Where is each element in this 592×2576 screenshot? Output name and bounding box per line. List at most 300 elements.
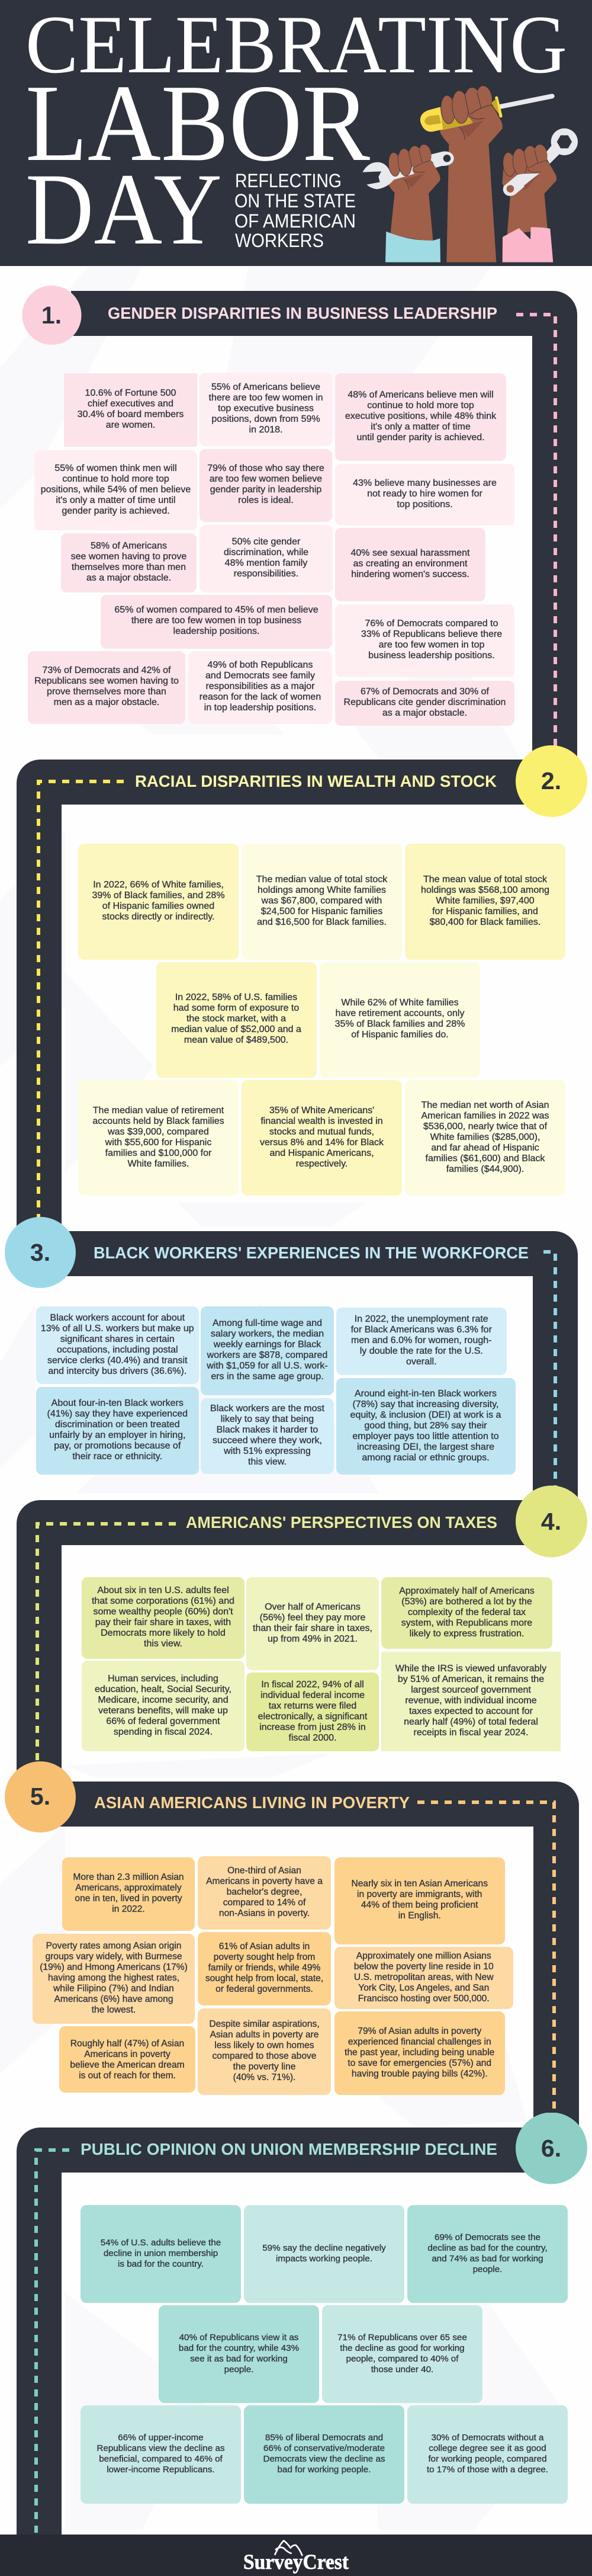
- card: complexity of the federal tax: [408, 1607, 526, 1617]
- card: [200, 525, 333, 592]
- card: [201, 1398, 334, 1474]
- card: 85% of liberal Democrats and: [265, 2433, 383, 2443]
- card: 58% of Americans: [91, 541, 167, 551]
- card: More than 2.3 million Asian: [73, 1872, 184, 1882]
- card: there are too few women in: [208, 393, 323, 403]
- card: 73% of Democrats and 42% of: [42, 665, 170, 675]
- card: 43% believe many businesses are: [353, 478, 497, 488]
- card: [188, 651, 332, 724]
- card: roles is ideal.: [238, 495, 294, 505]
- card: positions, while 54% of men believe: [41, 485, 191, 494]
- card: 66% of conservative/moderate: [263, 2443, 385, 2453]
- card: had some form of exposure to: [173, 1003, 299, 1013]
- card: business leadership positions.: [368, 651, 495, 661]
- card: and $16,500 for Black families.: [257, 917, 387, 927]
- card: electronically, a significant: [258, 1711, 367, 1722]
- card: (56%) feel they pay more: [260, 1613, 365, 1622]
- card: in 2022.: [112, 1904, 145, 1914]
- card: Black makes it harder to: [217, 1425, 318, 1435]
- card: continue to hold more top: [62, 474, 169, 483]
- card: likely to express frustration.: [410, 1628, 524, 1639]
- card: [61, 533, 197, 592]
- card: 76% of Democrats compared to: [365, 619, 498, 629]
- card: [334, 1857, 505, 1944]
- heading: GENDER DISPARITIES IN BUSINESS LEADERSHIP: [108, 304, 497, 322]
- card: holdings was $568,100 among: [421, 885, 549, 895]
- card: discrimination or been treated: [55, 1420, 180, 1430]
- card: prove themselves more than: [47, 687, 166, 697]
- illustration: raised fists with tools: [362, 85, 578, 262]
- card: Democrats view the decline as: [263, 2454, 385, 2464]
- card: White families ($285,000),: [430, 1132, 540, 1142]
- card: [320, 962, 480, 1078]
- card: [33, 1934, 195, 2024]
- card: while Filipino (7%) and Indian: [53, 1984, 174, 1994]
- card: are too few women believe: [210, 474, 322, 484]
- card: beneficial, compared to 46% of: [99, 2454, 223, 2464]
- card: [335, 604, 514, 677]
- card: executive positions, while 48% think: [345, 411, 496, 421]
- card: and 74% as bad for working: [432, 2254, 543, 2263]
- card: experienced financial challenges in: [348, 2037, 491, 2046]
- card: below the poverty line reside in 10: [354, 1961, 494, 1972]
- card: the poverty line: [233, 2062, 295, 2072]
- card: continue to hold more top: [367, 401, 474, 411]
- badge 6: [516, 2113, 587, 2184]
- badge 4: 4.: [541, 1508, 561, 1535]
- card: [381, 1652, 561, 1751]
- card: In 2022, the unemployment rate: [355, 1314, 488, 1324]
- card: likely to say that being: [221, 1414, 314, 1424]
- card: unfairly by an employer in hiring,: [49, 1430, 185, 1440]
- card: and Democrats see family: [205, 671, 315, 681]
- card: receipts in fiscal year 2024.: [414, 1728, 528, 1738]
- card: Human services, including: [108, 1673, 218, 1684]
- card: is out of reach for them.: [79, 2071, 176, 2081]
- card: people.: [224, 2364, 253, 2375]
- card: The median value of total stock: [256, 874, 387, 885]
- card: with $55,600 for Hispanic: [105, 1138, 211, 1147]
- card: [82, 1661, 244, 1751]
- card: [246, 1577, 379, 1670]
- badge 1: 1.: [41, 302, 62, 329]
- card: 71% of Republicans over 65 see: [337, 2332, 467, 2343]
- card: poverty sought help from: [214, 1952, 315, 1962]
- card: impacts working people.: [276, 2254, 372, 2263]
- card: are women.: [106, 420, 155, 430]
- card: significant shares in certain: [60, 1334, 175, 1344]
- card: ers in the same age group.: [211, 1372, 324, 1382]
- card: 35% of White Americans': [269, 1106, 374, 1115]
- card: [156, 962, 316, 1078]
- card: York City, Los Angeles, and San: [358, 1982, 489, 1993]
- card: [198, 1856, 331, 1930]
- card: responsibilities as a major: [205, 681, 315, 691]
- card: 66% of federal government: [106, 1716, 220, 1726]
- card: to 17% of those with a degree.: [427, 2465, 548, 2475]
- middle hand with screwdriver: [420, 85, 552, 144]
- card: [64, 373, 197, 447]
- card: gender parity is achieved.: [62, 506, 170, 515]
- card: was $39,000, compared: [108, 1127, 209, 1136]
- card: Democrats more likely to hold: [101, 1628, 226, 1638]
- badge 3: [5, 1217, 76, 1288]
- card: 67% of Democrats and 30% of: [361, 687, 489, 697]
- card: up from 49% in 2021.: [268, 1634, 358, 1643]
- section 5 road, heading and badge: [5, 1761, 579, 2126]
- card: this view.: [248, 1457, 287, 1467]
- card: and far ahead of Hispanic: [431, 1142, 539, 1153]
- card: [200, 449, 332, 522]
- subtitle: WORKERS: [235, 230, 324, 251]
- card: In 2022, 66% of White families,: [93, 880, 224, 890]
- card: [246, 1673, 379, 1751]
- subtitle: OF AMERICAN: [234, 210, 356, 232]
- section 1 road, heading and badge: [22, 286, 577, 756]
- badge 4: [516, 1486, 587, 1557]
- card: than their fair share in taxes,: [253, 1623, 372, 1633]
- card: 61% of Asian adults in: [219, 1941, 310, 1952]
- card: 44% of them being proficient: [361, 1900, 478, 1910]
- road: [17, 2128, 533, 2542]
- card: in English.: [398, 1911, 441, 1921]
- card: $24,500 for Hispanic families: [261, 906, 382, 917]
- card: in top leadership positions.: [204, 703, 316, 713]
- card: decline as bad for the country,: [427, 2243, 548, 2253]
- card: it's only a matter of time until: [56, 495, 176, 505]
- card: salary workers, the median: [211, 1329, 324, 1339]
- card: [59, 2026, 195, 2093]
- card: or federal governments.: [215, 1984, 313, 1994]
- card: (40% vs. 71%).: [233, 2072, 295, 2082]
- card: While 62% of White families: [341, 998, 459, 1008]
- card: non-Asians in poverty.: [219, 1908, 310, 1918]
- card: the lowest.: [92, 2005, 136, 2015]
- card: as a major obstacle.: [382, 708, 467, 718]
- card: [322, 2305, 482, 2403]
- heading: RACIAL DISPARITIES IN WEALTH AND STOCK: [135, 772, 497, 790]
- card: U.S. metropolitan areas, with New: [354, 1972, 494, 1982]
- card: [244, 2205, 404, 2303]
- road: [59, 1782, 579, 2145]
- card: with $1,059 for all U.S. work-: [207, 1361, 328, 1371]
- card: Among full-time wage and: [213, 1318, 322, 1328]
- card: [242, 1080, 402, 1196]
- card: to save for emergencies (57%) and: [348, 2058, 491, 2068]
- card: American families in 2022 was: [421, 1110, 549, 1121]
- card: of Hispanic families owned: [102, 901, 214, 911]
- card: 55% of Americans believe: [211, 382, 320, 392]
- card: some wealthy people (60%) don't: [93, 1607, 233, 1617]
- card: Republicans cite gender discrimination: [344, 697, 506, 707]
- card: employer pays too little attention to: [352, 1431, 499, 1441]
- card: of Hispanic families do.: [351, 1030, 449, 1040]
- section 6 road, heading and badge: [17, 2113, 587, 2535]
- card: Around eight-in-ten Black workers: [355, 1389, 497, 1398]
- card: While the IRS is viewed unfavorably: [395, 1664, 546, 1674]
- card: increasing DEI, the largest share: [357, 1442, 494, 1452]
- badge 3: 3.: [30, 1239, 50, 1266]
- card: versus 8% and 14% for Black: [260, 1138, 384, 1147]
- card: spending in fiscal 2024.: [114, 1726, 213, 1737]
- card: Roughly half (47%) of Asian: [70, 2039, 184, 2049]
- card: Americans (6%) have among: [54, 1994, 173, 2004]
- card: workers are $878, compared: [207, 1350, 327, 1360]
- card: Asian adults in poverty are: [210, 2030, 318, 2040]
- card: Black workers are the most: [210, 1404, 324, 1414]
- card: The mean value of total stock: [423, 874, 547, 885]
- card: [405, 844, 565, 960]
- card: by 51% of American, it remains the: [398, 1674, 544, 1684]
- card: revenue, with individual income: [405, 1696, 537, 1706]
- card: there are too few women in top business: [131, 616, 301, 626]
- card: occupations, including postal: [57, 1345, 178, 1354]
- badge 5: [5, 1761, 76, 1832]
- card: largest sourceof government: [411, 1685, 531, 1695]
- card: median value of $52,000 and a: [171, 1024, 301, 1034]
- card: Republicans see women having to: [34, 676, 179, 686]
- card: [336, 1308, 507, 1375]
- card: taxes expected to account for: [409, 1706, 533, 1716]
- card: mean value of $489,500.: [184, 1035, 288, 1045]
- card: [242, 844, 402, 960]
- card: top positions.: [397, 499, 453, 510]
- wordmark: SurveyCrest: [243, 2550, 349, 2574]
- card: not ready to hire women for: [367, 489, 482, 499]
- card: bad for working people.: [278, 2465, 371, 2475]
- card: [335, 463, 514, 526]
- card: those under 40.: [371, 2364, 433, 2375]
- card: White families.: [127, 1159, 189, 1168]
- card: decline in union membership: [104, 2248, 218, 2258]
- section 3 road, heading and badge: [5, 1217, 578, 1497]
- card: have retirement accounts, only: [336, 1008, 464, 1018]
- card: fiscal 2000.: [289, 1732, 336, 1743]
- right arm with sleeve: [503, 193, 553, 262]
- card: lower-income Republicans.: [107, 2465, 215, 2475]
- card: 13% of all U.S. workers but make up: [41, 1324, 194, 1333]
- card: until gender parity is achieved.: [356, 432, 485, 443]
- card: [159, 2305, 319, 2403]
- card: compared to 14% of: [223, 1898, 305, 1908]
- heading: BLACK WORKERS' EXPERIENCES IN THE WORKFORCE: [94, 1244, 529, 1262]
- card: families ($44,900).: [446, 1164, 524, 1174]
- road: [71, 291, 577, 770]
- card: in poverty are immigrants, with: [357, 1889, 482, 1899]
- card: 35% of Black families and 28%: [335, 1019, 465, 1029]
- right hand with wrench: [502, 129, 578, 196]
- card: system, with Republicans more: [401, 1617, 532, 1628]
- card: responsibilities.: [234, 569, 298, 579]
- card: [201, 1306, 334, 1395]
- card: among racial or ethnic groups.: [362, 1453, 490, 1462]
- card: (53%) are bothered a lot by the: [401, 1596, 532, 1607]
- card: Americans in poverty have a: [206, 1876, 323, 1886]
- card: ly double the rate for the U.S.: [360, 1346, 483, 1356]
- card: [78, 1080, 239, 1196]
- card: pay, or promotions because of: [54, 1441, 181, 1451]
- card: see it as bad for working: [190, 2353, 288, 2364]
- card: [34, 450, 197, 530]
- card: [36, 1386, 199, 1475]
- title: labor: LABOR: [25, 62, 370, 184]
- card: Nearly six in ten Asian Americans: [351, 1879, 488, 1889]
- card: the stock market, with a: [186, 1014, 286, 1024]
- card: their race or ethnicity.: [72, 1452, 162, 1462]
- card: individual federal income: [260, 1690, 365, 1700]
- card: Black workers account for about: [50, 1313, 185, 1322]
- card: $536,000, nearly twice that of: [423, 1121, 547, 1132]
- title: day: DAY: [25, 153, 222, 266]
- card: for Black Americans was 6.3% for: [351, 1325, 492, 1335]
- card: sought help from local, state,: [205, 1973, 323, 1984]
- card: [62, 1857, 195, 1931]
- card: Approximately one million Asians: [356, 1950, 491, 1961]
- panel: section 6 union membership: [17, 2113, 587, 2535]
- card: [407, 2405, 568, 2504]
- card: [405, 1080, 565, 1196]
- card: [198, 1932, 331, 2005]
- card: [101, 595, 332, 648]
- card: for Hispanic families, and: [432, 906, 538, 917]
- card: people, compared to 40% of: [346, 2353, 458, 2364]
- card: and intercity bus drivers (36.6%).: [48, 1366, 186, 1376]
- card: 54% of U.S. adults believe the: [101, 2237, 221, 2248]
- subtitle: [234, 170, 356, 251]
- card: (19%) and Hmong Americans (17%): [40, 1962, 188, 1972]
- card: Francisco hosting over 500,000.: [358, 1993, 490, 2004]
- card: Poverty rates among Asian origin: [46, 1941, 181, 1951]
- card: is bad for the country.: [118, 2258, 204, 2269]
- card: believe the American dream: [70, 2060, 185, 2070]
- card: 48% of Americans believe men will: [348, 390, 494, 400]
- card: 69% of Democrats see the: [435, 2232, 540, 2242]
- panel: section 2 racial disparities: [17, 745, 587, 1226]
- card: respectively.: [296, 1159, 348, 1168]
- card: 59% say the decline negatively: [262, 2243, 386, 2253]
- card: [82, 1577, 244, 1659]
- card: succeed where they work,: [213, 1436, 322, 1446]
- card: education, healt, Social Security,: [95, 1684, 231, 1694]
- card: as creating an environment: [353, 559, 468, 569]
- card: [244, 2405, 404, 2504]
- header banner: [0, 0, 592, 266]
- card: that some corporations (61%) and: [92, 1596, 234, 1606]
- card: Approximately half of Americans: [399, 1585, 535, 1596]
- card: see women having to prove: [71, 552, 186, 562]
- badge 2: [516, 745, 587, 817]
- road: [17, 760, 533, 1244]
- card: 30.4% of board members: [78, 409, 184, 419]
- card: chief executives and: [88, 399, 173, 409]
- heading: AMERICANS' PERSPECTIVES ON TAXES: [186, 1513, 497, 1531]
- card: [336, 1378, 515, 1475]
- card: [198, 2008, 331, 2095]
- card: Americans in poverty: [84, 2049, 170, 2059]
- card: as a major obstacle.: [86, 573, 171, 583]
- card: About six in ten U.S. adults feel: [97, 1585, 229, 1595]
- card: 50% cite gender: [232, 537, 300, 547]
- card: 65% of women compared to 45% of men believe: [114, 605, 318, 615]
- middle arm: [446, 143, 496, 262]
- card: $80,400 for Black families.: [430, 917, 540, 927]
- card: 33% of Republicans believe there: [361, 629, 502, 639]
- card: less likely to own homes: [214, 2040, 314, 2050]
- card: 49% of both Republicans: [208, 660, 313, 670]
- card: stocks and mutual funds,: [269, 1127, 374, 1136]
- card: one in ten, lived in poverty: [75, 1893, 182, 1904]
- road: [59, 1231, 578, 1517]
- subtitle: REFLECTING: [235, 170, 342, 191]
- card: [335, 680, 514, 726]
- card: (78%) say that increasing diversity,: [353, 1399, 498, 1409]
- card: compared to those above: [212, 2051, 316, 2061]
- card: themselves more than men: [72, 562, 186, 572]
- icon: mountain: [275, 2540, 303, 2556]
- card: overall.: [406, 1357, 437, 1367]
- card: [381, 1577, 552, 1649]
- card: bachelor's degree,: [227, 1887, 302, 1897]
- card: groups vary widely, with Burmese: [45, 1952, 182, 1962]
- road: [17, 1500, 533, 1801]
- card: 40% of Republicans view it as: [179, 2332, 298, 2343]
- card: top executive business: [218, 403, 314, 414]
- card: holdings among White families: [258, 885, 386, 895]
- card: it's only a matter of time: [371, 422, 471, 432]
- card: [407, 2205, 568, 2303]
- heading: PUBLIC OPINION ON UNION MEMBERSHIP DECLINE: [81, 2140, 497, 2158]
- card: bad for the country, while 43%: [179, 2343, 299, 2353]
- card: [81, 2405, 241, 2504]
- card: 55% of women think men will: [54, 463, 177, 473]
- card: positions, down from 59%: [211, 414, 320, 424]
- left arm with sleeve: [385, 193, 440, 262]
- card: for working people, compared: [428, 2454, 547, 2464]
- footer: [0, 2535, 592, 2576]
- card: 66% of upper-income: [118, 2433, 204, 2443]
- badge 5: 5.: [30, 1783, 50, 1810]
- card: [78, 844, 239, 960]
- card: pay their fair share in taxes, with: [95, 1617, 231, 1627]
- card: The median value of retirement: [93, 1106, 224, 1115]
- card: men as a major obstacle.: [54, 697, 159, 707]
- card: gender parity in leadership: [210, 485, 321, 495]
- badge 6: 6.: [541, 2135, 561, 2162]
- card: are too few women in top: [379, 640, 484, 650]
- card: weekly earnings for Black: [214, 1340, 321, 1350]
- card: Despite similar aspirations,: [209, 2019, 320, 2029]
- card: the decline as good for working: [340, 2343, 465, 2353]
- badge 2: 2.: [541, 767, 561, 794]
- section 2 road, heading and badge: [17, 745, 587, 1226]
- card: 48% mention family: [225, 558, 307, 568]
- card: service clerks (40.4%) and transit: [47, 1356, 188, 1365]
- logo: SurveyCrest: [243, 2540, 349, 2574]
- card: 40% see sexual harassment: [350, 548, 470, 558]
- header title and illustration: [25, 0, 578, 266]
- card: leadership positions.: [173, 626, 259, 636]
- card: In fiscal 2022, 94% of all: [261, 1679, 364, 1690]
- card: [36, 1306, 199, 1384]
- card: men and 6.0% for women, rough-: [351, 1335, 491, 1345]
- card: [334, 1947, 513, 2009]
- card: accounts held by Black families: [92, 1116, 224, 1126]
- card: people.: [473, 2264, 502, 2274]
- card: was $67,800, compared with: [262, 896, 382, 906]
- card: stocks directly or indirectly.: [102, 912, 214, 922]
- card: veterans benefits, will make up: [98, 1705, 228, 1716]
- card: financial wealth is invested in: [260, 1116, 383, 1126]
